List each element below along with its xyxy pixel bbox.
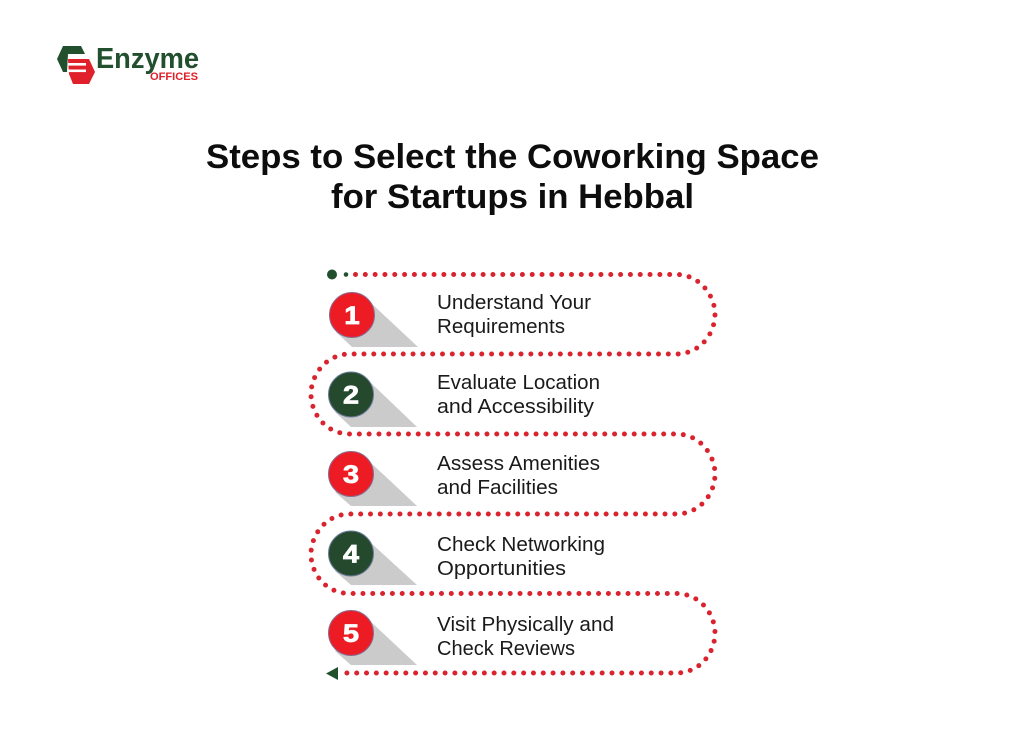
step 1 — [330, 292, 591, 347]
step 5 shadow — [335, 621, 417, 665]
logo — [57, 43, 199, 84]
step 1 number: 1 — [344, 301, 360, 330]
step 5 label — [437, 614, 614, 660]
logo wordmark: Enzyme — [96, 43, 199, 75]
step 4 number: 4 — [343, 540, 359, 568]
step 2 number: 2 — [343, 381, 359, 409]
step 4 badge — [328, 531, 374, 576]
step 4 — [328, 531, 605, 585]
step 3 badge — [328, 452, 374, 496]
step 2 — [328, 372, 600, 427]
step 5 badge — [328, 610, 374, 656]
step 4 label — [437, 534, 605, 580]
step 2 label: and Accessibility — [437, 396, 594, 418]
step 5 number: 5 — [343, 620, 359, 648]
step 4 label: Check Networking — [437, 534, 605, 556]
step 1 badge — [330, 292, 374, 338]
step 2 label — [437, 372, 600, 418]
step 5 — [328, 610, 614, 665]
step 3 label: and Facilities — [437, 477, 558, 499]
step 3 — [328, 452, 600, 506]
step 1 label: Understand Your — [437, 292, 591, 314]
step 4 shadow — [335, 542, 417, 585]
step 2 shadow — [335, 382, 417, 427]
dotted path — [311, 274, 715, 673]
step 2 label: Evaluate Location — [437, 372, 600, 394]
step 1 label — [437, 292, 591, 338]
step 5 label: Check Reviews — [437, 638, 575, 660]
step 3 shadow — [335, 462, 417, 506]
title: for Startups in Hebbal — [331, 178, 694, 216]
step 4 label: Opportunities — [437, 558, 566, 580]
logo icon — [57, 46, 95, 84]
path start dots — [327, 270, 348, 280]
step 1 shadow — [336, 303, 418, 347]
arrow head — [326, 667, 338, 680]
step 3 label: Assess Amenities — [437, 453, 600, 475]
title: Steps to Select the Coworking Space — [206, 138, 819, 176]
step 2 badge — [328, 372, 374, 417]
step 1 label: Requirements — [437, 316, 565, 338]
step 3 number: 3 — [343, 461, 359, 489]
logo subtext: OFFICES — [150, 71, 198, 83]
title — [206, 138, 819, 216]
step 5 label: Visit Physically and — [437, 614, 614, 636]
step 3 label — [437, 453, 600, 499]
